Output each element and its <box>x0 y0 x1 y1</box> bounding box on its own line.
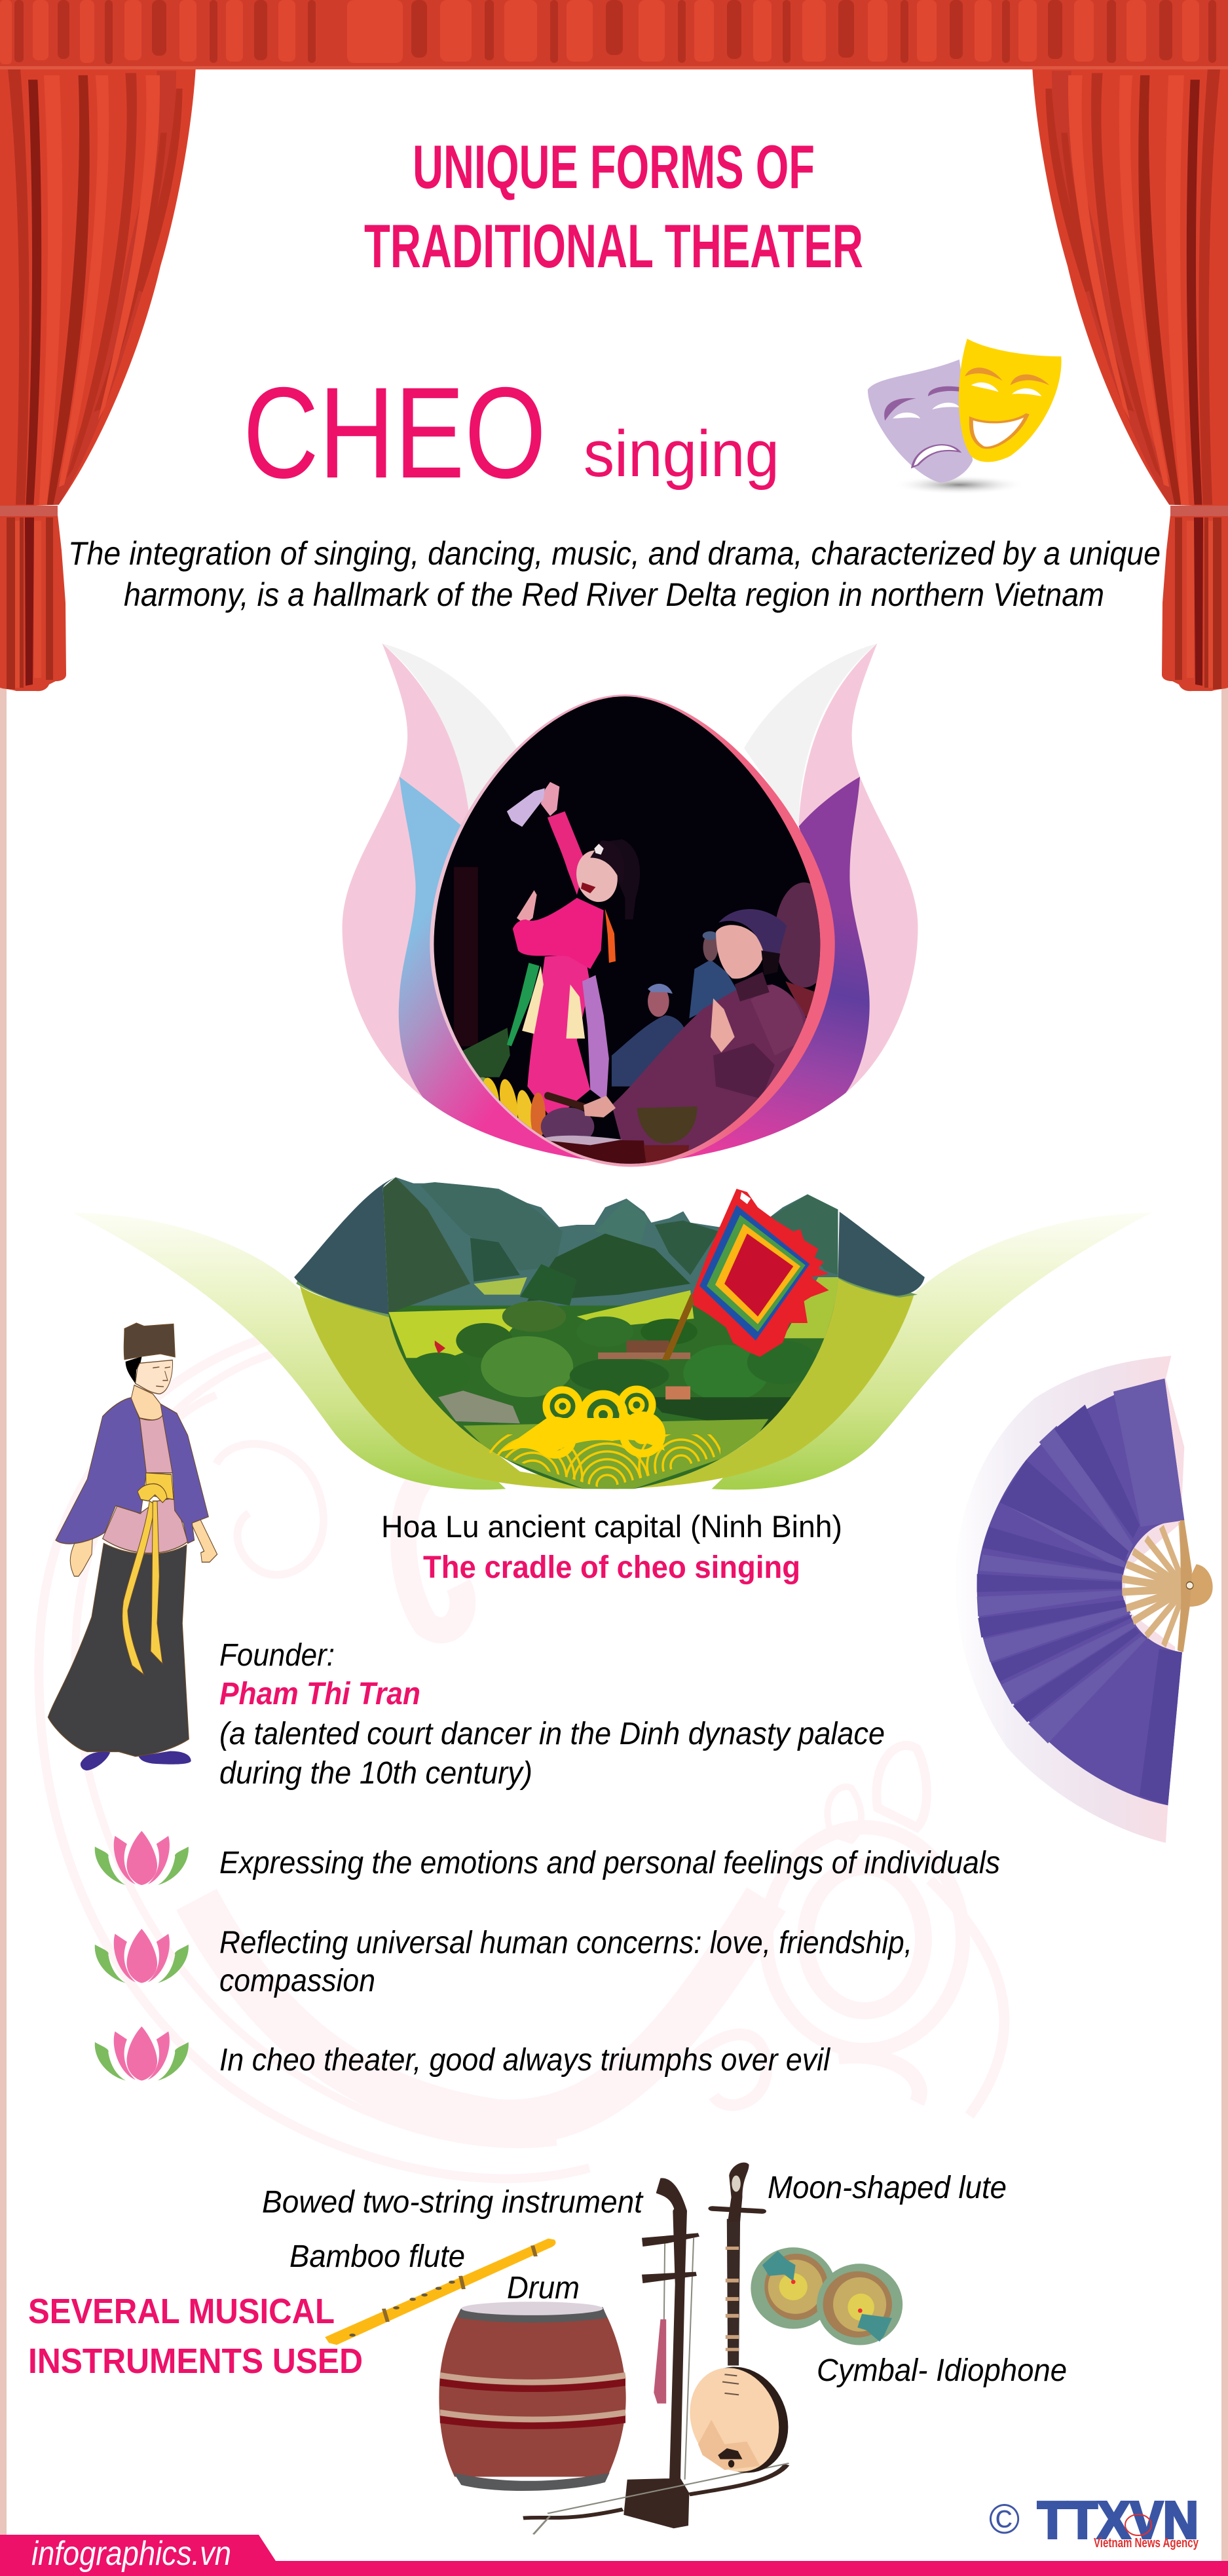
title: TRADITIONAL THEATER <box>364 212 863 280</box>
caption: Hoa Lu: Hoa Lu ancient capital (Ninh Binh) <box>381 1509 842 1544</box>
caption: Hoa Lu <box>381 1509 842 1585</box>
footer band <box>0 2535 1228 2576</box>
text: human concerns <box>219 1926 912 1998</box>
instruments heading: INSTRUMENTS USED <box>28 2342 363 2381</box>
lotus frame: green lower petals <box>73 1177 1152 1489</box>
yellow cloud and wave motif <box>489 1386 720 1487</box>
founder text: Pham Thi Tran <box>219 1677 420 1711</box>
page side borders <box>0 681 1228 2576</box>
instrument labels: Bamboo flute <box>289 2239 465 2274</box>
instrument: drum <box>439 2302 626 2491</box>
photo: Hoa Lu landscape <box>378 1174 847 1491</box>
instrument labels: Moon-shaped lute <box>768 2171 1007 2205</box>
intro text: The integration of singing, dancing, music, and drama, characterized by a unique <box>68 535 1161 572</box>
caption: Hoa Lu: The cradle of cheo singing <box>423 1550 800 1585</box>
photo: cheo performers <box>430 694 835 1167</box>
founder text: Founder: <box>219 1638 335 1673</box>
instrument: bowed two-string <box>523 2178 789 2534</box>
instruments heading <box>28 2292 363 2381</box>
illustration: founder Pham Thi Tran <box>48 1323 217 1770</box>
text: human concerns: Reflecting universal human concerns: love, friendship, <box>219 1926 912 1960</box>
intro text <box>68 535 1161 613</box>
lotus frame: upper petals <box>343 643 918 1165</box>
title: UNIQUE FORMS OF <box>413 132 815 201</box>
illustration: purple fan <box>956 1356 1213 1843</box>
icon: lotus bullet 1 <box>95 1831 189 1885</box>
instrument labels: Drum <box>507 2271 580 2305</box>
logo: TTXVN: © <box>989 2495 1020 2543</box>
instrument labels: Cymbal- Idiophone <box>817 2353 1067 2388</box>
icon: lotus bullet 3 <box>95 2026 189 2081</box>
founder text: (a talented court dancer in the Dinh dynasty palace <box>219 1717 885 1751</box>
instruments heading: SEVERAL MUSICAL <box>28 2292 335 2331</box>
flag <box>665 1189 829 1360</box>
text: emotions: Expressing the emotions and personal feelings of individuals <box>219 1846 1000 1880</box>
instrument labels <box>262 2171 1067 2388</box>
instrument: bamboo flute <box>325 2239 556 2345</box>
icon: lotus bullet 2 <box>95 1929 189 1983</box>
instrument labels: Bowed two-string instrument <box>262 2185 644 2220</box>
heading: cheo singing <box>243 360 779 505</box>
instrument: cymbals <box>751 2247 902 2345</box>
heading: cheo singing: singing <box>584 417 779 491</box>
title <box>364 132 863 280</box>
heading: cheo singing: CHEO <box>243 360 546 505</box>
right curtain <box>1032 66 1228 691</box>
text: human concerns: compassion <box>219 1964 375 1998</box>
logo: TTXVN: TTXVN <box>1037 2491 1199 2549</box>
text: good triumphs: In cheo theater, good always triumphs over evil <box>219 2043 830 2078</box>
founder text: during the 10th century) <box>219 1756 532 1791</box>
background swirl ornament <box>39 1320 1004 2178</box>
footer band: infographics.vn <box>31 2535 231 2573</box>
founder text <box>219 1638 885 1791</box>
top valance <box>0 0 1228 69</box>
instrument: moon-shaped lute <box>682 2163 796 2476</box>
icon: theater masks <box>868 339 1062 495</box>
intro text: harmony, is a hallmark of the Red River Delta region in northern Vietnam <box>124 576 1104 613</box>
left curtain <box>0 66 196 691</box>
